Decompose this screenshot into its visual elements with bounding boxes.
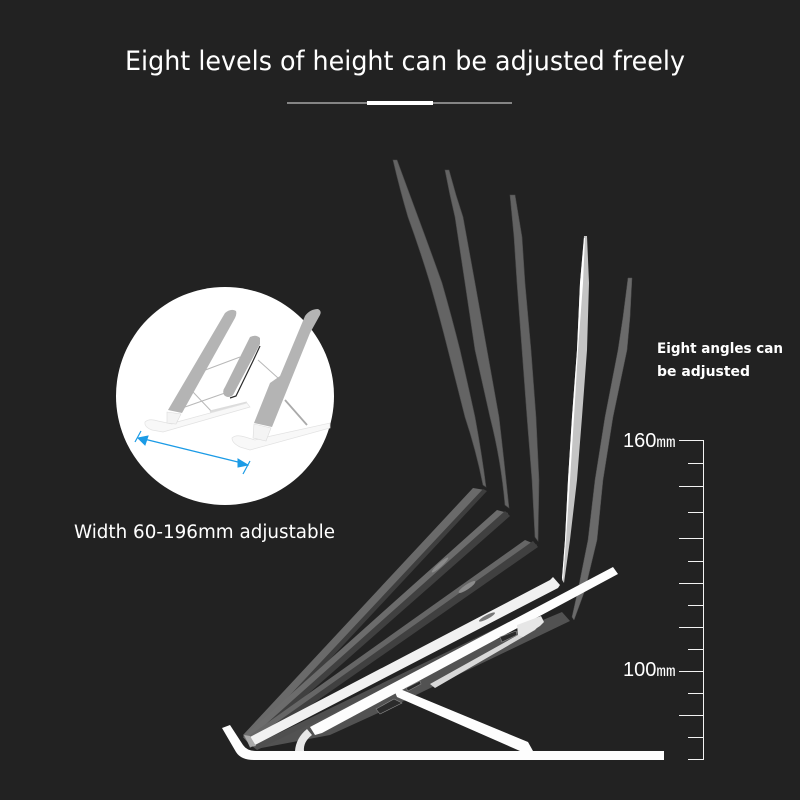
stand base with hook — [222, 725, 664, 760]
white tablet base 4 — [244, 577, 563, 750]
angle note: be adjusted — [657, 364, 750, 380]
tablet screen 3 — [510, 195, 539, 541]
stand left foot — [145, 403, 250, 432]
tablet screen 4 — [562, 236, 589, 583]
ruler label 100mm: 100mm — [623, 659, 676, 681]
title: Eight levels of height can be adjusted freely — [125, 46, 685, 77]
stand cross braces — [185, 357, 307, 425]
stand hinge blocks — [167, 412, 271, 441]
middle arm dark edge — [230, 346, 260, 398]
tablet base 3 — [246, 540, 538, 748]
title underline — [287, 101, 512, 105]
stand left arm — [168, 310, 236, 413]
inset caption: Width 60-196mm adjustable — [74, 522, 335, 543]
hinge block on plate — [517, 616, 544, 637]
tablet screen 5 — [572, 278, 632, 620]
tablet screen 1 — [393, 160, 486, 487]
rear slot details — [376, 631, 517, 714]
ruler label 160mm: 160mm — [623, 430, 676, 452]
stand rear support strut — [395, 689, 533, 751]
tablet base 2 — [243, 510, 510, 745]
blue width arrow — [135, 431, 250, 474]
angle note: Eight angles can — [657, 341, 783, 357]
stand right foot — [232, 423, 330, 450]
tablet base 5, under plate — [256, 612, 570, 749]
tablet screen 2 — [445, 170, 509, 508]
stand top plate — [310, 567, 618, 735]
tablet base 1 — [243, 488, 487, 745]
stand front strut — [295, 729, 312, 751]
stand middle arm — [223, 336, 260, 397]
circular inset: stand width — [116, 287, 334, 505]
stand right arm — [254, 309, 321, 427]
angle note — [657, 341, 783, 380]
height ruler — [679, 440, 704, 760]
